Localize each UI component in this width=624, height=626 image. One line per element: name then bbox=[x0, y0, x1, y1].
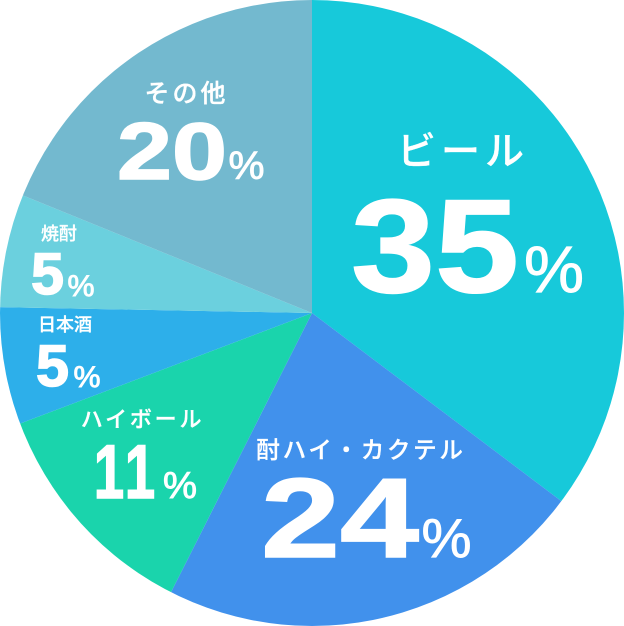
label: highball: ハイボール bbox=[81, 402, 204, 434]
label: sake: 日本酒 bbox=[38, 311, 92, 337]
label: other: その他 bbox=[144, 74, 229, 110]
slice: other 20% bbox=[0, 0, 312, 313]
slice: highball 11% bbox=[20, 313, 312, 592]
value: sake 5% bbox=[36, 334, 100, 399]
value: shochu 5% bbox=[31, 242, 94, 307]
value: highball 11%: 11 bbox=[94, 430, 155, 515]
value: chuhai and cocktail 24%: 24 bbox=[261, 455, 419, 581]
label: shochu: 焼酎 bbox=[41, 220, 77, 246]
slice: shochu 5% bbox=[0, 196, 312, 313]
value: highball 11%: % bbox=[163, 465, 197, 506]
value: sake 5%: % bbox=[74, 361, 100, 394]
value: shochu 5%: % bbox=[68, 270, 94, 303]
label: beer: ビール bbox=[397, 121, 529, 177]
slice: beer 35% bbox=[312, 0, 624, 502]
value: chuhai and cocktail 24%: % bbox=[422, 507, 472, 569]
label: chuhai and cocktail: 酎ハイ・カクテル bbox=[256, 431, 466, 465]
value: highball 11% bbox=[94, 430, 197, 515]
value: beer 35%: 35 bbox=[351, 173, 519, 321]
value: other 20% bbox=[117, 107, 264, 197]
value: sake 5%: 5 bbox=[36, 334, 69, 399]
slice: chuhai and cocktail 24% bbox=[171, 313, 562, 626]
slice: sake 5% bbox=[0, 307, 312, 435]
value: other 20%: 20 bbox=[117, 107, 227, 197]
value: shochu 5%: 5 bbox=[31, 242, 64, 307]
value: beer 35% bbox=[351, 173, 584, 321]
value: other 20%: % bbox=[228, 145, 264, 188]
value: chuhai and cocktail 24% bbox=[261, 455, 472, 581]
value: beer 35%: % bbox=[524, 232, 584, 306]
